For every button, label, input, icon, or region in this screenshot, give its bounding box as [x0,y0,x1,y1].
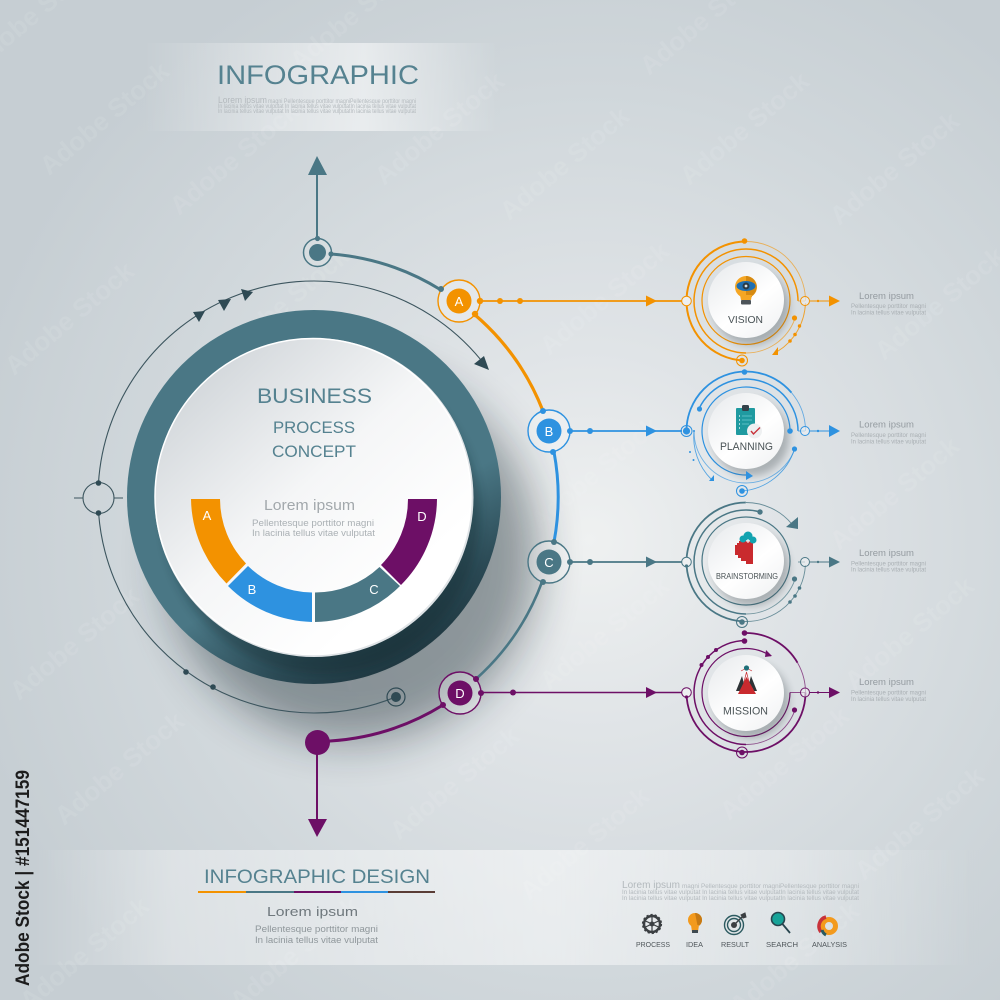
planning caption: In lacinia tellus vitae vulputat [851,440,926,446]
segment A: A [203,508,212,523]
mission caption: Lorem ipsum [859,677,914,688]
bottom purple node and arrow [305,730,330,837]
vision caption: Lorem ipsum [859,291,914,302]
icon: analysis chart [819,917,836,935]
vision rings [679,234,813,368]
watermark pattern: Adobe Stock [384,720,525,846]
segment A [191,499,246,584]
brainstorming disc [713,530,789,606]
bottom right body text: In lacinia tellus vitae vulputat In lacinia tellus vitae vulputatIn lacinia tellus vitae vulputat [622,889,859,896]
planning node dots [681,369,810,496]
planning disc [713,400,789,476]
segment C: C [369,582,379,597]
vertical stock credit: Adobe Stock | #151447159 [13,770,34,986]
panel: mission [665,611,926,774]
bottom right body text: Lorem ipsum [622,880,680,891]
watermark pattern: Adobe Stock [534,235,675,361]
icon labels: IDEA [686,942,703,949]
main disc caption: Lorem ipsum [264,498,355,514]
orbit end node [387,688,405,706]
bottom banner caption: In lacinia tellus vitae vulputat [255,935,378,946]
mission node dots [682,630,810,758]
icon labels: RESULT [721,942,750,949]
mission caption [851,677,926,703]
main disc caption: Pellentesque porttitor magni [252,518,374,529]
bottom banner caption [255,904,378,946]
top banner body text: Lorem ipsum [218,95,267,105]
connector A to vision [480,296,682,306]
segment D: D [417,509,427,524]
left orbit node [74,480,123,516]
main circle with shadow [127,310,538,742]
node D [439,672,484,714]
watermark pattern: Adobe Stock [4,580,145,706]
icon: mission mountains [736,665,757,694]
vision caption: In lacinia tellus vitae vulputat [851,310,926,316]
planning caption: Pellentesque porttitor magni [851,433,926,439]
arrowheads on orbit [193,289,489,370]
segment D [381,499,437,585]
watermark pattern: Adobe Stock [159,390,300,516]
mission caption: In lacinia tellus vitae vulputat [851,697,926,703]
node D: D [455,686,465,701]
node A [438,280,483,322]
main title text: BUSINESS [257,384,372,408]
bottom right body text: magni Pellentesque porttitor magniPellentesque porttitor magni [682,883,859,890]
white disc [154,338,474,657]
watermark pattern: Adobe Stock [49,705,190,831]
bottom right body text [622,880,859,902]
brainstorming node dots [682,509,810,628]
panel: brainstorming [679,495,926,629]
main arc connectors [330,254,558,741]
watermark pattern: Adobe Stock [369,65,510,191]
watermark pattern: Adobe Stock [849,760,990,886]
panel: vision [679,234,926,368]
node C [528,539,573,585]
icon: vision bulb with eye [735,276,757,304]
watermark pattern: Adobe Stock [824,105,965,231]
top teal node and arrow [304,156,334,266]
panel: planning [662,347,926,515]
top banner [140,43,500,131]
main title text: CONCEPT [272,443,356,461]
segment B: B [248,582,256,597]
brainstorming caption: Pellentesque porttitor magni [851,562,926,568]
icon labels: PROCESS [636,942,670,949]
brainstorming caption [851,548,926,574]
planning output arrow [810,425,840,437]
watermark pattern: Adobe Stock [534,570,675,696]
brainstorming caption: Lorem ipsum [859,548,914,559]
bottom right body text: In lacinia tellus vitae vulputat In lacinia tellus vitae vulputatIn lacinia tellus vitae vulputat [622,895,859,902]
top banner body text: magni Pellentesque porttitor magniPellentesque porttitor magni [268,99,416,105]
node B [528,408,573,455]
watermark pattern: Adobe Stock [494,100,635,226]
planning caption [851,420,926,446]
watermark pattern: Adobe Stock [839,570,980,696]
coloured underline [198,891,435,893]
watermark pattern: Adobe Stock [34,55,175,181]
orbit dots [183,669,216,690]
watermark pattern: Adobe Stock [674,65,815,191]
watermark pattern: Adobe Stock [524,410,665,536]
brainstorming output arrow [810,556,840,568]
icon: search magnifier [772,912,790,933]
main title text [257,384,372,461]
top banner body text [218,95,416,115]
node A: A [455,294,464,309]
vision caption: Pellentesque porttitor magni [851,304,926,310]
vision output arrow [810,296,840,306]
icon: result target [724,913,746,934]
top banner body text: In lacinia tellus vitae vulputat In lacinia tellus vitae vulputatIn lacinia tellus vitae vulputat [218,109,416,115]
main title text: PROCESS [273,419,355,437]
vision caption [851,291,926,316]
icon: process gear [643,915,661,933]
icon: planning clipboard [736,405,762,438]
bottom banner [30,850,980,965]
icon labels [636,942,847,949]
thin orbit arc with arrows [32,215,596,779]
mission rings [665,611,827,774]
mission disc [713,662,789,738]
mission label: MISSION [723,706,768,718]
node C: C [544,555,554,570]
heading: infographic: INFOGRAPHIC [217,60,419,90]
connector B to planning [570,426,682,436]
watermark pattern: Adobe Stock [0,255,140,381]
planning caption: Lorem ipsum [859,420,914,430]
bottom banner caption: Lorem ipsum [267,904,358,919]
bottom banner caption: Pellentesque porttitor magni [255,924,378,935]
mission output arrow [810,687,840,698]
top banner body text: In lacinia tellus vitae vulputat In lacinia tellus vitae vulputatIn lacinia tellus vitae vulputat [218,104,416,110]
icon: brainstorming head [735,532,756,564]
vision node dots [682,238,810,366]
icon labels: SEARCH [766,942,798,949]
brainstorming caption: In lacinia tellus vitae vulputat [851,568,926,574]
vision label: VISION [728,314,763,326]
outer teal ring [127,310,501,684]
mission caption: Pellentesque porttitor magni [851,690,926,696]
main disc caption [252,498,375,539]
heading: infographic design: INFOGRAPHIC DESIGN [204,867,430,888]
watermark pattern: Adobe Stock [714,700,855,826]
watermark pattern: Adobe Stock [164,95,305,221]
planning label: PLANNING [720,441,773,453]
connector C to brainstorming [570,556,682,568]
icon: idea bulb [688,913,702,933]
planning rings [662,347,830,515]
node B: B [545,424,553,439]
segment C [315,567,400,622]
segment B [228,566,312,622]
icon labels: ANALYSIS [812,942,847,949]
brainstorming label: BRAINSTORMING [716,572,778,581]
watermark pattern: Adobe Stock [514,780,655,906]
watermark pattern: Adobe Stock [824,430,965,556]
watermark pattern: Adobe Stock [214,240,355,366]
connector D to mission [481,687,682,698]
main disc caption: In lacinia tellus vitae vulputat [252,528,375,539]
brainstorming rings [679,495,813,629]
vision disc [713,269,789,345]
watermark pattern: Adobe Stock [334,570,475,696]
